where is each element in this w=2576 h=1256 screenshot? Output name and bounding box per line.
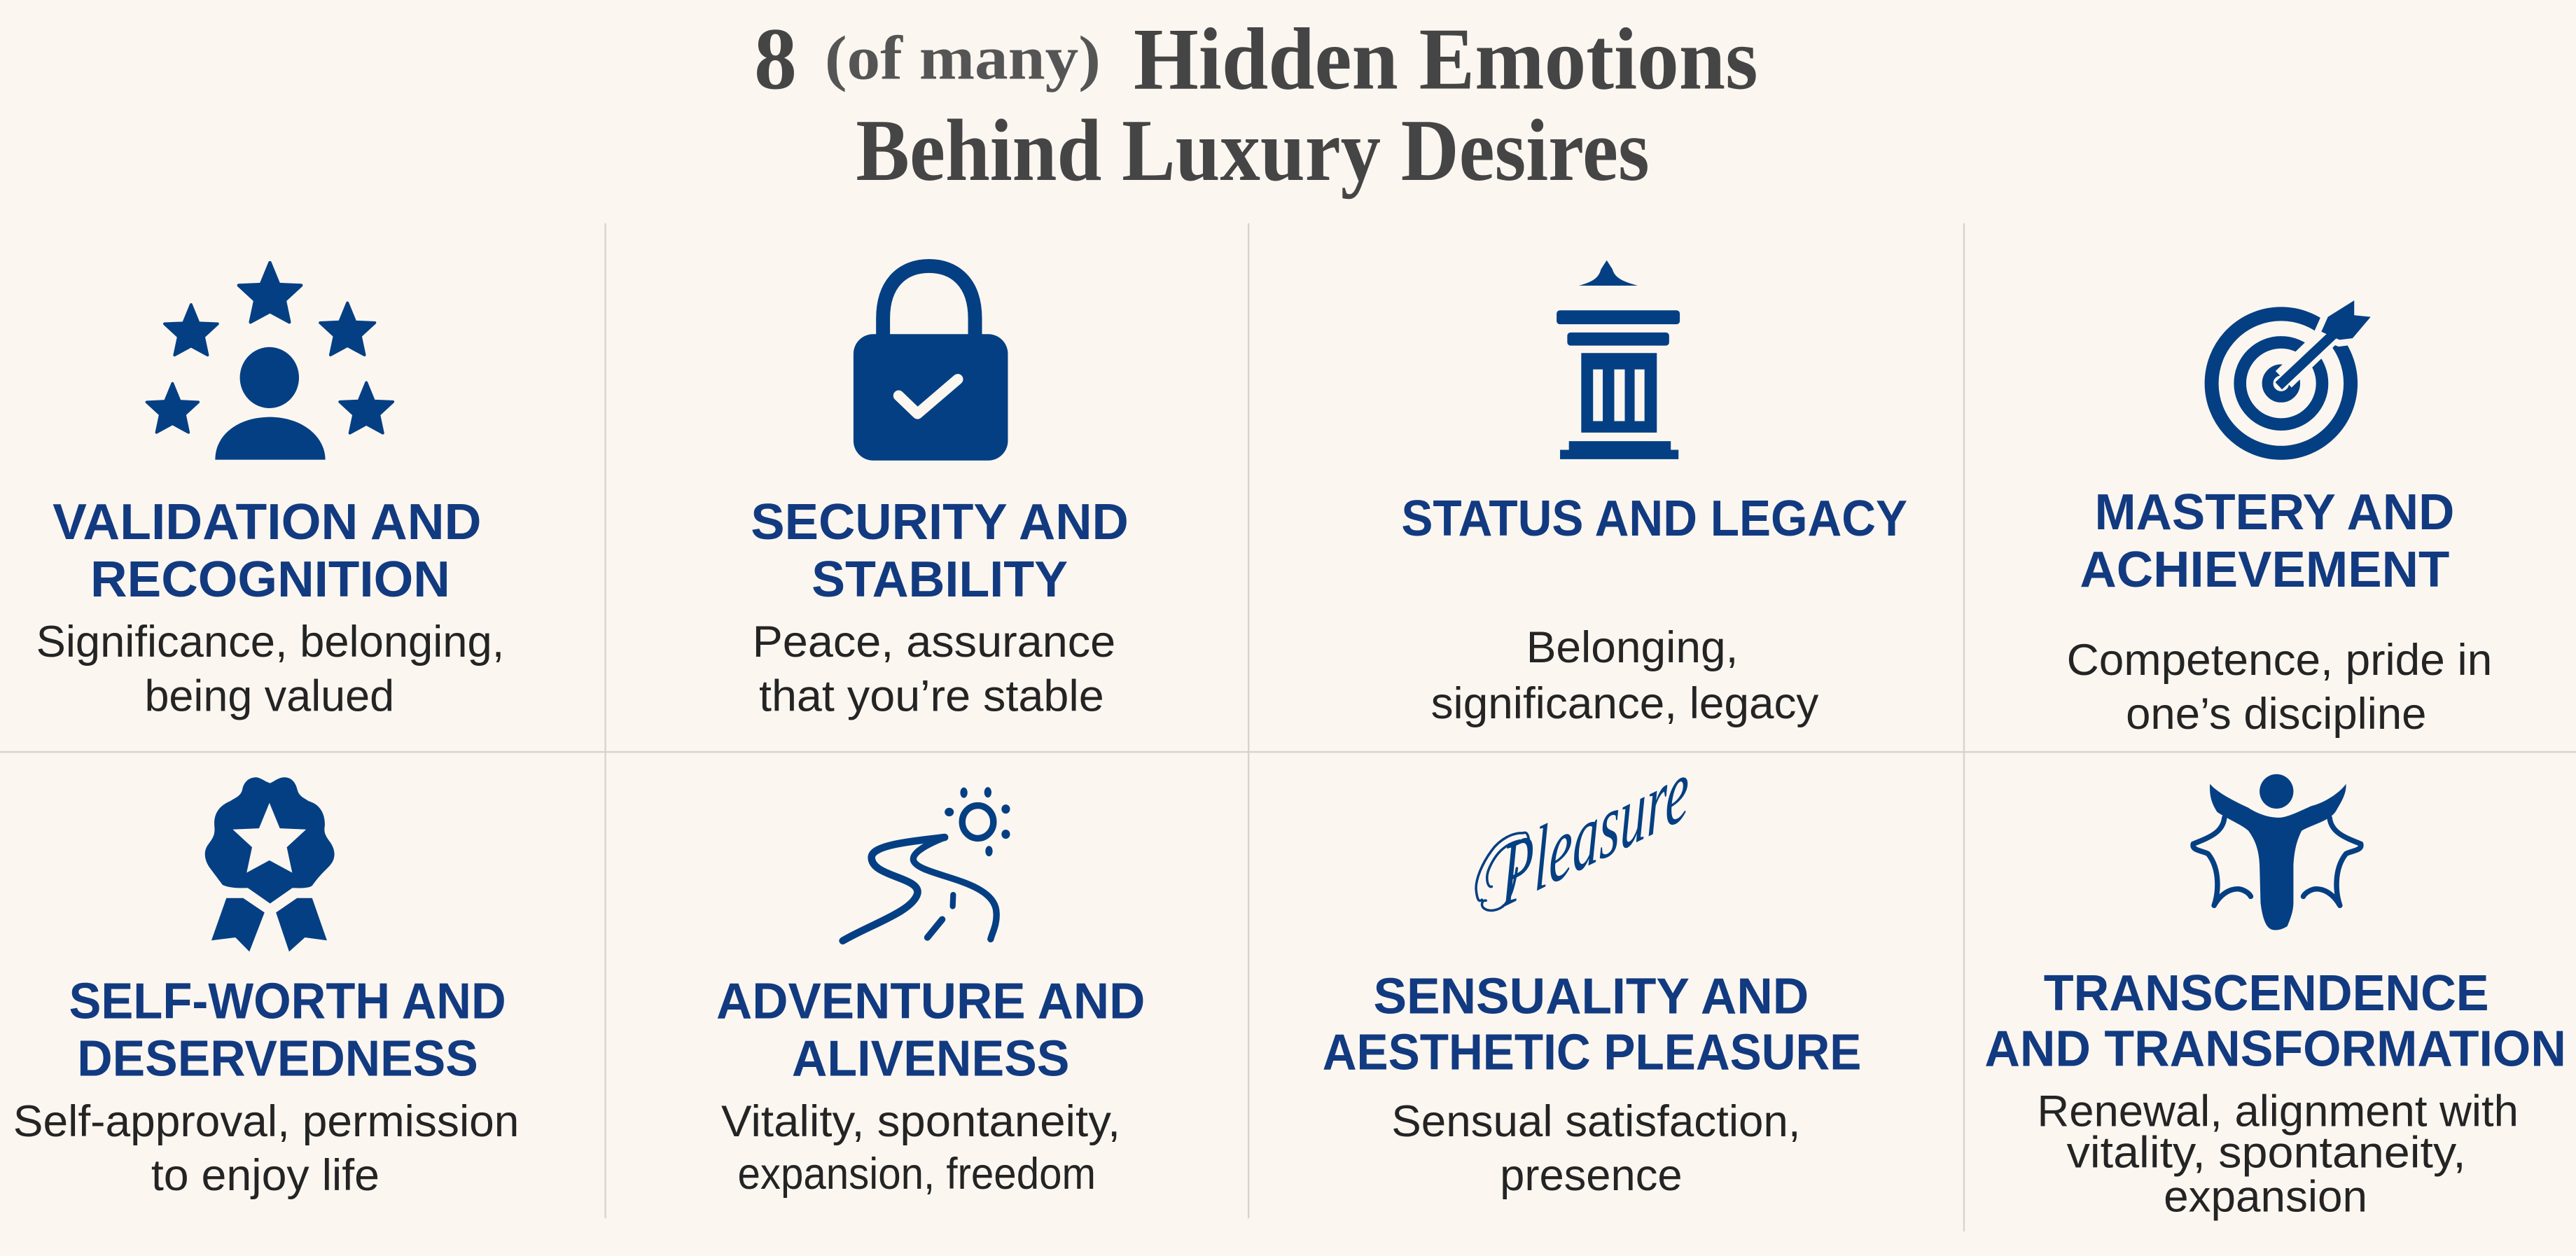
description: Renewal, alignment with	[2037, 1087, 2519, 1136]
description: Peace, assurance	[753, 617, 1115, 667]
heading: ALIVENESS	[792, 1031, 1069, 1087]
description: one’s discipline	[2126, 690, 2426, 739]
description: significance, legacy	[1431, 679, 1819, 728]
heading: RECOGNITION	[90, 551, 450, 608]
description: presence	[1500, 1151, 1683, 1200]
description	[2037, 1087, 2519, 1222]
description	[2067, 636, 2492, 739]
icon: target with arrow	[2212, 300, 2371, 453]
description: Vitality, spontaneity,	[721, 1097, 1120, 1146]
panel: mastery and achievement	[2067, 300, 2492, 739]
heading: SECURITY AND	[751, 494, 1129, 550]
description: being valued	[144, 671, 394, 720]
panel: validation and recognition	[36, 263, 504, 720]
icon: rosette with star	[205, 777, 335, 951]
icon: figure with raised arms and wings	[2193, 774, 2361, 930]
title: (of many)	[825, 25, 1101, 93]
heading	[1323, 968, 1861, 1080]
heading: AESTHETIC PLEASURE	[1323, 1024, 1861, 1080]
title: Behind Luxury Desires	[856, 102, 1650, 200]
description: to enjoy life	[151, 1151, 380, 1200]
panel: status and legacy	[1401, 260, 1907, 728]
title: 8	[754, 11, 797, 109]
panel: adventure and aliveness	[716, 787, 1145, 1199]
heading: TRANSCENDENCE	[2044, 965, 2489, 1021]
heading	[69, 973, 506, 1087]
title: Hidden Emotions	[1134, 11, 1758, 109]
heading: STABILITY	[812, 551, 1068, 608]
description: that you’re stable	[759, 671, 1104, 720]
description: Competence, pride in	[2067, 636, 2492, 685]
heading	[2080, 484, 2454, 598]
description: Significance, belonging,	[36, 617, 504, 667]
description	[36, 617, 504, 720]
panel: sensuality and aesthetic pleasure	[1323, 736, 1861, 1200]
title	[754, 11, 1758, 200]
description: Sensual satisfaction,	[1391, 1097, 1801, 1146]
panel: security and stability	[751, 266, 1129, 720]
description	[13, 1097, 519, 1200]
icon: column	[1557, 260, 1680, 459]
icon: script word Pleasure	[1476, 736, 1689, 928]
heading: MASTERY AND	[2095, 484, 2454, 540]
icon: script word Pleasure: Pleasure	[1501, 736, 1689, 928]
panel: self-worth and deservedness	[13, 777, 519, 1200]
panel: transcendence and transformation	[1984, 774, 2566, 1222]
heading: ACHIEVEMENT	[2080, 541, 2449, 598]
description	[753, 617, 1115, 720]
description	[721, 1097, 1120, 1199]
icon: winding road and sun	[843, 787, 1010, 941]
heading: SENSUALITY AND	[1374, 968, 1809, 1025]
heading: DESERVEDNESS	[77, 1031, 478, 1087]
heading	[1984, 965, 2566, 1077]
heading: SELF-WORTH AND	[69, 973, 506, 1030]
description: Belonging,	[1526, 623, 1738, 672]
description: vitality, spontaneity,	[2067, 1128, 2466, 1177]
heading	[716, 973, 1145, 1087]
icon: padlock with check	[854, 266, 1008, 461]
heading: ADVENTURE AND	[716, 973, 1145, 1030]
description	[1431, 623, 1819, 728]
description: expansion	[2164, 1173, 2367, 1222]
description: Self-approval, permission	[13, 1097, 519, 1146]
heading	[751, 494, 1129, 608]
description: expansion, freedom	[737, 1150, 1096, 1199]
icon: person with five stars	[147, 263, 393, 460]
heading	[53, 494, 481, 608]
heading: STATUS AND LEGACY	[1401, 490, 1907, 547]
heading: AND TRANSFORMATION	[1984, 1021, 2566, 1077]
heading: VALIDATION AND	[53, 494, 481, 550]
description	[1391, 1097, 1801, 1200]
